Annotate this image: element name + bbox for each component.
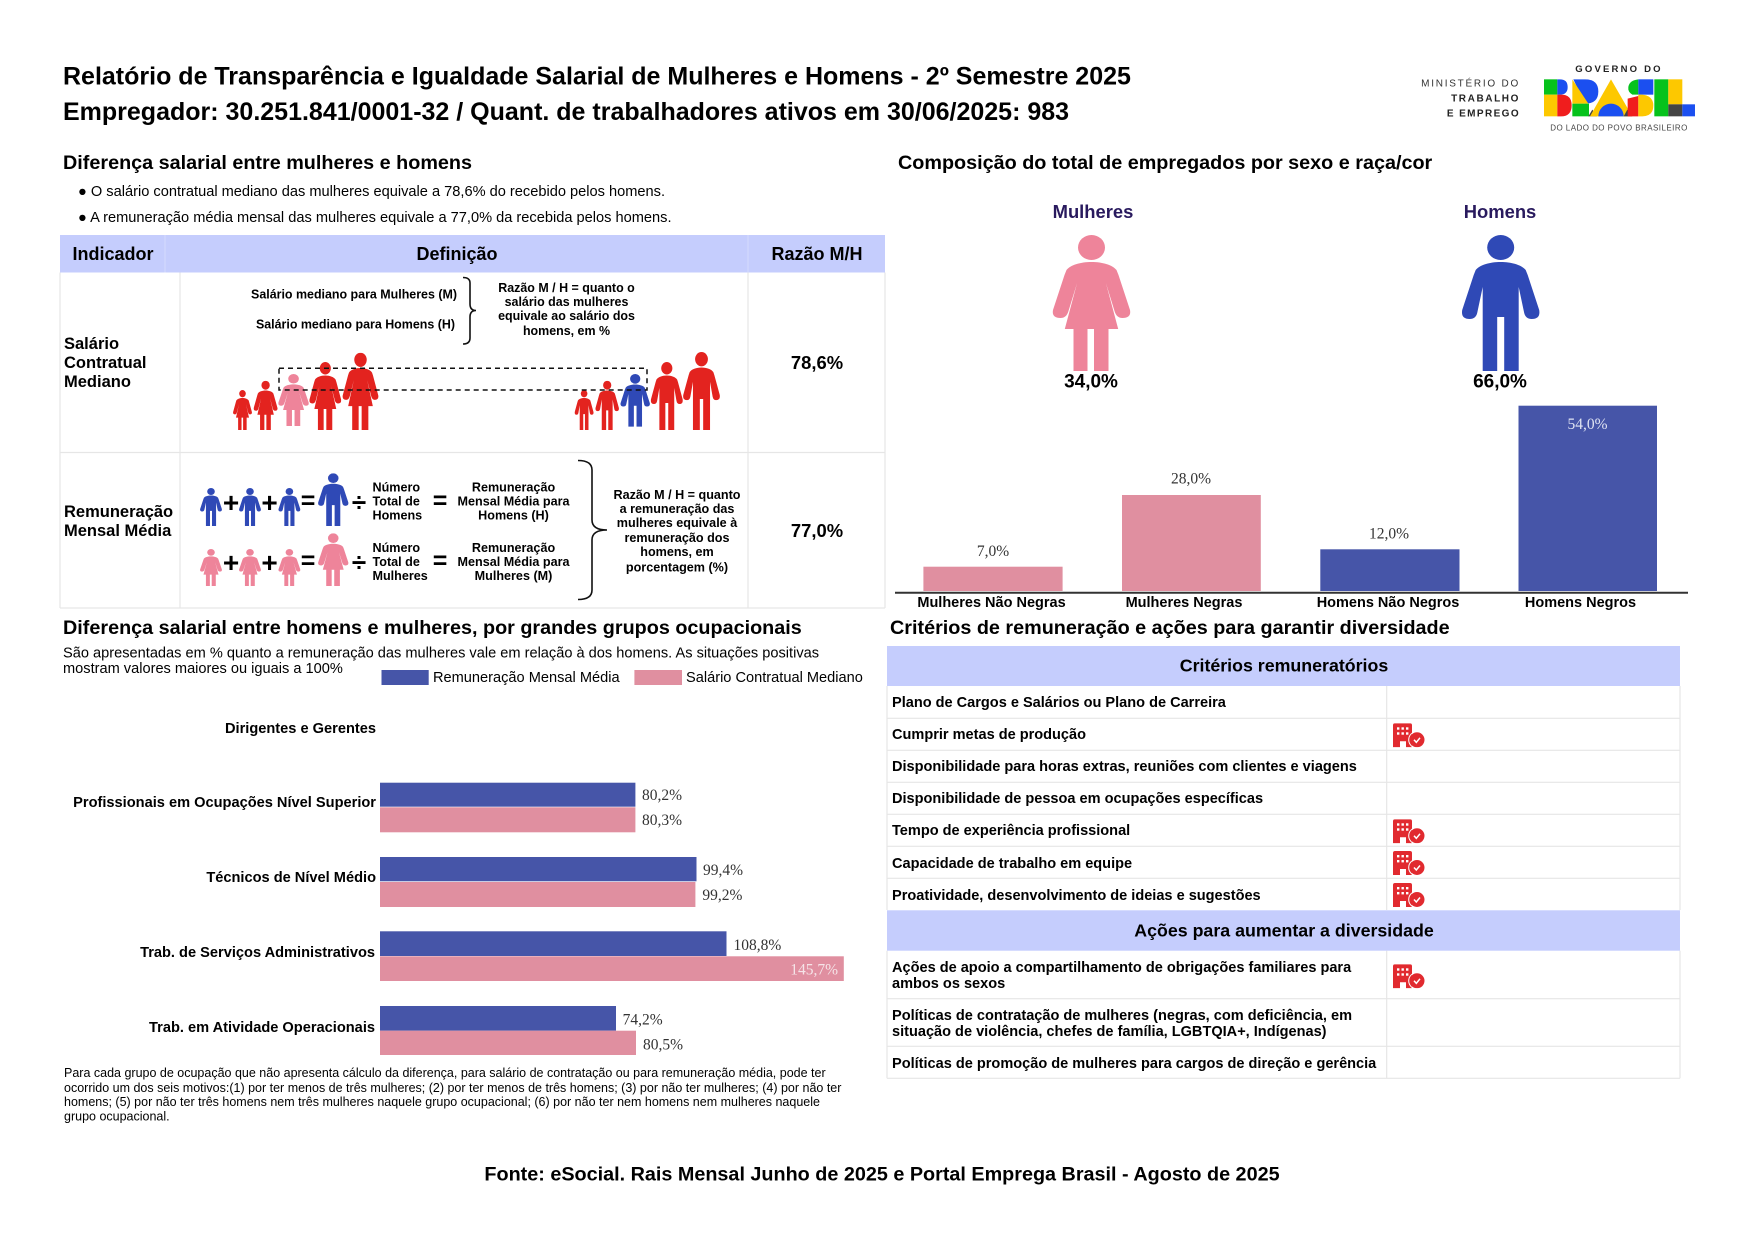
formula: homens: +	[223, 487, 239, 518]
panel: critérios e ações: Políticas de contratação de mulheres (negras, com deficiência, em	[892, 1008, 1352, 1024]
formula: mulheres: +	[223, 547, 239, 578]
row: remuneração mensal média: Razão M / H = quanto	[614, 488, 741, 502]
panel: critérios e ações: Disponibilidade de pessoa em ocupações específicas	[892, 791, 1263, 807]
logo: Ministério do Trabalho e Emprego: E EMPREGO	[1447, 108, 1520, 120]
row: remuneração mensal média: remuneração dos	[624, 531, 730, 545]
source: Fonte: eSocial. Rais Mensal Junho de 2025 e Portal Emprega Brasil - Agosto de 2025	[484, 1164, 1280, 1186]
panel: critérios e ações: Políticas de promoção de mulheres para cargos de direção e gerência	[892, 1056, 1377, 1072]
text block: descrição do gráfico: mostram valores maiores ou iguais a 100%	[63, 661, 343, 677]
table header: Indicador	[72, 244, 154, 264]
title: Relatório de Transparência e Igualdade Salarial de Mulheres e Homens - 2º Semestre 2025	[63, 62, 1131, 90]
bar chart: grupos ocupacionais: 99,2%	[702, 887, 743, 904]
row: remuneração mensal média: 77,0%	[791, 520, 843, 541]
header: critérios remuneratórios	[887, 646, 1680, 686]
panel: critérios e ações	[887, 646, 1680, 1078]
bar chart: sexo e raça/cor: 7,0%	[977, 543, 1009, 560]
panel: critérios e ações: Cumprir metas de produção	[892, 727, 1086, 743]
icon: homens em ordem de salário	[575, 352, 720, 430]
bar chart: sexo e raça/cor: 54,0%	[1567, 416, 1608, 433]
row: salário contratual mediano: Salário mediano para Mulheres (M)	[251, 288, 457, 302]
logo: Ministério do Trabalho e Emprego	[1421, 76, 1520, 120]
bar chart: grupos ocupacionais: 108,8%	[734, 937, 781, 954]
bar chart: grupos ocupacionais: 80,5%	[643, 1036, 683, 1054]
icon group: homens	[1462, 201, 1539, 392]
row: salário contratual mediano: Razão M / H = quanto o	[498, 281, 635, 295]
row: salário contratual mediano: salário das mulheres	[505, 295, 628, 309]
title: Empregador: 30.251.841/0001-32 / Quant. de trabalhadores ativos em 30/06/2025: 983	[63, 98, 1069, 126]
formula: mulheres: Remuneração	[472, 541, 555, 555]
bar chart: sexo e raça/cor: Mulheres Não Negras	[917, 595, 1066, 611]
panel: critérios e ações: ambos os sexos	[892, 976, 1005, 992]
formula: mulheres: Número	[372, 541, 420, 555]
table header	[60, 235, 885, 272]
row: salário contratual mediano: Mediano	[64, 373, 131, 391]
formula: homens	[200, 473, 570, 526]
heading: diferença por grupos ocupacionais: Diferença salarial entre homens e mulheres, por grandes grupos ocupacionais	[63, 617, 802, 639]
text block: descrição do gráfico	[63, 646, 819, 677]
icons: prédio com check	[1393, 723, 1425, 989]
row: remuneração mensal média: a remuneração das	[620, 502, 734, 516]
title	[63, 62, 1131, 126]
formula: mulheres: Mulheres	[372, 569, 428, 583]
bar chart: grupos ocupacionais: Profissionais em Ocupações Nível Superior	[73, 795, 376, 811]
bar chart: sexo e raça/cor	[895, 406, 1688, 611]
bar chart: grupos ocupacionais	[73, 721, 844, 1055]
formula: homens: Total de	[372, 494, 420, 508]
footnote: homens; (5) por não ter três homens nem três mulheres naquele grupo ocupacional; (6) por não ter nem homens nem mulheres naquele	[64, 1095, 820, 1109]
legend: Salário Contratual Mediano	[686, 670, 863, 686]
footnote: Para cada grupo de ocupação que não apresenta cálculo da diferença, para salário de contratação ou para remuneração média, pode ter	[64, 1066, 826, 1080]
icon: mulheres em ordem de salário	[233, 353, 378, 430]
table header: Definição	[416, 244, 498, 264]
bar chart: sexo e raça/cor: Homens Negros	[1525, 595, 1636, 611]
row: salário contratual mediano: Contratual	[64, 354, 146, 372]
formula: homens: Homens (H)	[478, 508, 549, 522]
formula: homens: ÷	[352, 487, 366, 517]
header: ações: Ações para aumentar a diversidade	[1134, 920, 1434, 940]
text block: descrição do gráfico: São apresentadas em % quanto a remuneração das mulheres vale em relação à dos homens. As situações positivas	[63, 646, 819, 662]
formula: mulheres: Mensal Média para	[458, 555, 570, 569]
bullets: resumo	[78, 184, 672, 226]
panel: tabela de indicadores	[60, 235, 885, 608]
bar chart: grupos ocupacionais: 80,2%	[642, 787, 682, 804]
row: salário contratual mediano	[64, 278, 843, 430]
logo: Ministério do Trabalho e Emprego: MINISTÉRIO DO	[1421, 76, 1520, 90]
header: critérios remuneratórios: Critérios remuneratórios	[1180, 656, 1388, 676]
legend	[382, 670, 863, 686]
formula: homens: Número	[372, 480, 420, 494]
table header: Razão M/H	[771, 244, 863, 264]
formula: homens: +	[261, 487, 278, 518]
legend: Remuneração Mensal Média	[433, 670, 620, 686]
formula: homens: Remuneração	[472, 480, 555, 494]
panel: critérios e ações: Plano de Cargos e Salários ou Plano de Carreira	[892, 695, 1227, 711]
panel: critérios e ações: Disponibilidade para horas extras, reuniões com clientes e viagens	[892, 759, 1357, 775]
heading: composição: Composição do total de empregados por sexo e raça/cor	[898, 152, 1433, 174]
row: remuneração mensal média: mulheres equivale à	[617, 516, 738, 530]
row: salário contratual mediano: Salário mediano para Homens (H)	[256, 318, 455, 332]
logo: Governo do Brasil: GOVERNO DO	[1575, 64, 1663, 75]
bullets: resumo: ● A remuneração média mensal das mulheres equivale a 77,0% da recebida pelos homens.	[78, 210, 672, 226]
formula: mulheres: Mulheres (M)	[475, 569, 552, 583]
panel: critérios e ações: Ações de apoio a compartilhamento de obrigações familiares para	[892, 960, 1352, 976]
row: salário contratual mediano: 78,6%	[791, 352, 843, 373]
heading: diferença salarial: Diferença salarial entre mulheres e homens	[63, 152, 472, 174]
formula: mulheres: +	[261, 547, 278, 578]
heading: critérios: Critérios de remuneração e ações para garantir diversidade	[890, 617, 1450, 639]
bar chart: grupos ocupacionais: Dirigentes e Gerentes	[225, 721, 376, 737]
bar chart: grupos ocupacionais: Técnicos de Nível Médio	[206, 870, 376, 886]
formula: homens: Homens	[372, 508, 422, 522]
bar chart: sexo e raça/cor: 28,0%	[1171, 470, 1211, 488]
row: remuneração mensal média: porcentagem (%)	[626, 560, 728, 574]
formula: homens: =	[301, 487, 315, 515]
row: salário contratual mediano: homens, em %	[523, 324, 610, 338]
formula: mulheres: Total de	[372, 555, 420, 569]
icon group: homens: 66,0%	[1473, 372, 1527, 392]
formula: homens: =	[433, 487, 447, 515]
icon group: mulheres	[1053, 201, 1133, 392]
row: salário contratual mediano: equivale ao salário dos	[498, 309, 635, 323]
formula: mulheres: ÷	[352, 547, 366, 577]
footnote	[64, 1066, 841, 1124]
header: ações	[887, 910, 1680, 951]
bar chart: grupos ocupacionais: 145,7%	[790, 962, 838, 978]
formula: mulheres: =	[433, 547, 447, 575]
logo: Governo do Brasil: DO LADO DO POVO BRASILEIRO	[1550, 124, 1688, 132]
row: remuneração mensal média: Mensal Média	[64, 522, 172, 540]
logo: Governo do Brasil	[1544, 64, 1695, 132]
panel: critérios e ações: situação de violência, chefes de família, LGBTQIA+, Indígenas)	[892, 1024, 1327, 1040]
bar chart: grupos ocupacionais: 80,3%	[642, 812, 682, 829]
bullets: resumo: ● O salário contratual mediano das mulheres equivale a 78,6% do recebido pelos homens.	[78, 184, 665, 200]
panel: critérios e ações: Tempo de experiência profissional	[892, 823, 1130, 839]
logo: Ministério do Trabalho e Emprego: TRABALHO	[1451, 94, 1520, 104]
bar chart: grupos ocupacionais: Trab. em Atividade Operacionais	[149, 1020, 375, 1036]
formula: mulheres	[200, 533, 570, 586]
bar chart: grupos ocupacionais: 74,2%	[623, 1012, 663, 1028]
row: remuneração mensal média: homens, em	[640, 545, 714, 559]
icon group: mulheres: Mulheres	[1053, 201, 1133, 222]
icon group: mulheres: 34,0%	[1064, 372, 1118, 392]
row: remuneração mensal média: Remuneração	[64, 503, 173, 521]
bar chart: grupos ocupacionais: 99,4%	[703, 862, 743, 879]
bar chart: grupos ocupacionais: Trab. de Serviços Administrativos	[140, 945, 375, 961]
formula: mulheres: =	[301, 547, 315, 575]
formula: homens: Mensal Média para	[458, 494, 570, 508]
row: salário contratual mediano: Salário	[64, 335, 119, 353]
icon group: homens: Homens	[1464, 201, 1536, 222]
footnote: ocorrido um dos seis motivos:(1) por ter menos de três mulheres; (2) por ter menos de três homens; (3) por não ter mulheres; (4) por não ter	[64, 1081, 841, 1095]
panel: critérios e ações: Proatividade, desenvolvimento de ideias e sugestões	[892, 888, 1261, 904]
footnote: grupo ocupacional.	[64, 1110, 170, 1124]
bar chart: sexo e raça/cor: Mulheres Negras	[1126, 595, 1242, 611]
bar chart: sexo e raça/cor: Homens Não Negros	[1317, 595, 1459, 611]
bar chart: sexo e raça/cor: 12,0%	[1369, 526, 1409, 542]
panel: critérios e ações: Capacidade de trabalho em equipe	[892, 856, 1132, 872]
row: remuneração mensal média	[64, 460, 843, 600]
